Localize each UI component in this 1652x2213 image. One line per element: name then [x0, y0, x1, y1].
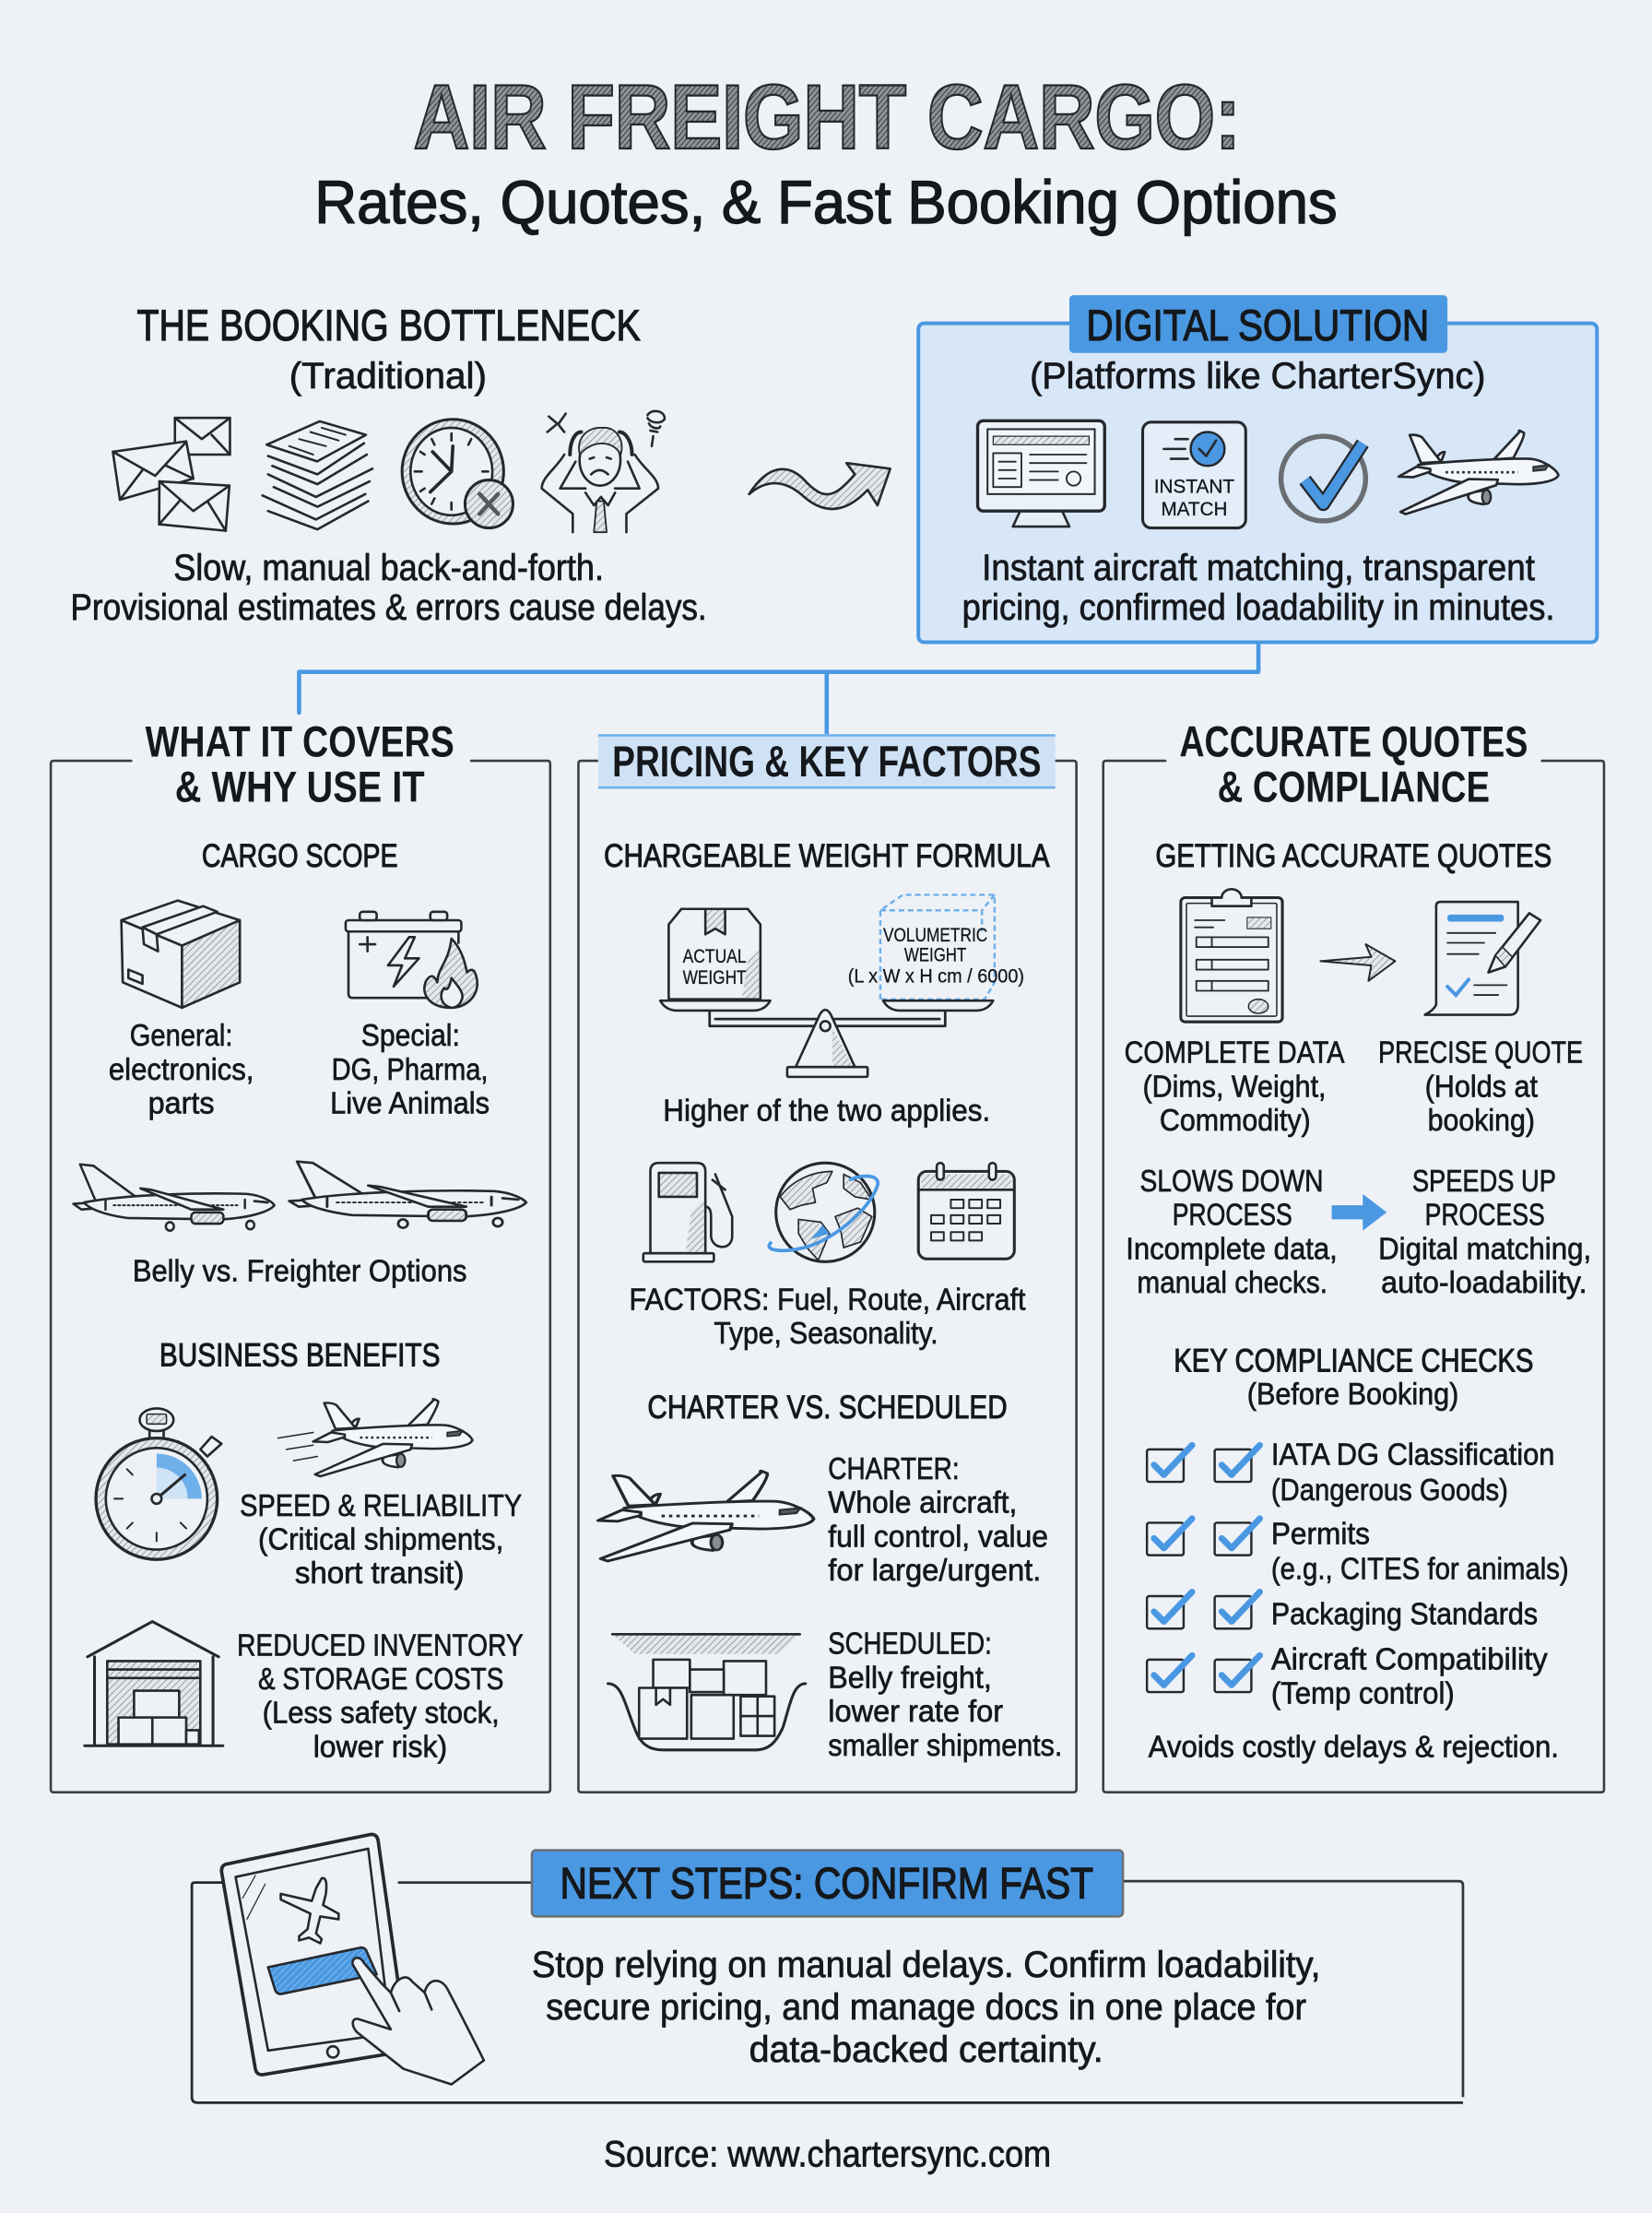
text: next steps body: secure pricing, and manage docs in one place for: [546, 1987, 1306, 2028]
icon: fast airplane: [277, 1399, 472, 1476]
text: speed and reliability: [240, 1489, 522, 1591]
icon: belly aircraft: [74, 1165, 275, 1231]
text: avoids delays: Avoids costly delays & rejection.: [1149, 1730, 1559, 1764]
caption: digital solution: Instant aircraft matching, transparent: [982, 548, 1535, 588]
caption: digital solution: pricing, confirmed loadability in minutes.: [962, 587, 1554, 628]
text: reduced inventory: & STORAGE COSTS: [258, 1663, 503, 1697]
text: special cargo: Special:: [361, 1019, 460, 1053]
heading: what it covers: WHAT IT COVERS: [146, 717, 454, 766]
checklist: compliance items: IATA DG Classification: [1271, 1438, 1554, 1473]
text: slows down process: PROCESS: [1173, 1199, 1292, 1233]
text: speeds up process: Digital matching,: [1378, 1232, 1591, 1266]
text: slows down process: [1126, 1165, 1338, 1300]
checklist: compliance items: Permits: [1271, 1517, 1370, 1551]
subheading: platforms: (Platforms like CharterSync): [1030, 356, 1485, 396]
icon: charter airplane: [598, 1471, 814, 1561]
text: precise quote: [1378, 1036, 1583, 1138]
text: higher of two: Higher of the two applies.: [663, 1094, 990, 1128]
icon: envelopes: [112, 418, 230, 531]
icon: balance scale: WEIGHT: [904, 943, 966, 965]
icon: instant match: MATCH: [1161, 498, 1227, 520]
text: reduced inventory: lower risk): [313, 1730, 447, 1764]
subheading: chargeable weight: CHARGEABLE WEIGHT FORMULA: [604, 838, 1050, 874]
icon: battery and flame: [346, 912, 478, 1008]
arrow: data to quote: [1320, 944, 1395, 981]
caption: traditional booking: Provisional estimates & errors cause delays.: [71, 587, 707, 628]
text: special cargo: Live Animals: [330, 1087, 490, 1121]
label: next steps: NEXT STEPS: CONFIRM FAST: [560, 1860, 1093, 1909]
icon: clock with x badge: [402, 420, 513, 528]
subheading: key compliance checks: (Before Booking): [1247, 1378, 1458, 1412]
text: precise quote: PRECISE QUOTE: [1378, 1036, 1583, 1071]
text: general cargo: [109, 1019, 254, 1121]
connector lines: [299, 643, 1258, 734]
heading: the booking bottleneck: THE BOOKING BOTTLENECK: [136, 302, 641, 350]
text: general cargo: electronics,: [109, 1053, 254, 1087]
text: factors: Type, Seasonality.: [714, 1317, 938, 1351]
subheading: key compliance checks: [1174, 1343, 1533, 1412]
text: scheduled: Belly freight,: [828, 1661, 992, 1695]
text: slows down process: manual checks.: [1137, 1266, 1328, 1300]
panel: next steps: [192, 1834, 1463, 2102]
text: belly vs freighter: Belly vs. Freighter Options: [133, 1255, 467, 1289]
icon: airplane: [1398, 431, 1558, 515]
heading: what it covers: [146, 717, 454, 811]
subheading: charter vs scheduled: CHARTER VS. SCHEDULED: [647, 1390, 1008, 1426]
icon: stopwatch: [96, 1408, 221, 1559]
icon: balance scale: VOLUMETRIC: [883, 924, 987, 946]
icon: cardboard box: [122, 901, 240, 1008]
icon: freighter aircraft: [289, 1162, 526, 1228]
panel: accurate quotes and compliance: [1103, 717, 1604, 1793]
checklist: compliance items: [1147, 1438, 1569, 1710]
heading: accurate quotes: ACCURATE QUOTES: [1179, 717, 1528, 766]
text: special cargo: DG, Pharma,: [332, 1053, 488, 1087]
panel: the booking bottleneck: [71, 302, 707, 628]
icon: quote document and pen: [1425, 902, 1540, 1015]
icon: monitor: [978, 420, 1104, 527]
subheading: key compliance checks: KEY COMPLIANCE CHECKS: [1174, 1343, 1533, 1379]
checklist: compliance items: (e.g., CITES for animals): [1271, 1553, 1569, 1587]
text: general cargo: parts: [148, 1087, 215, 1121]
text: charter: Whole aircraft,: [828, 1486, 1017, 1521]
icon: balance scale: ACTUAL: [683, 945, 747, 967]
heading: accurate quotes: [1179, 717, 1528, 811]
heading: accurate quotes: & COMPLIANCE: [1218, 763, 1490, 811]
text: factors: [630, 1283, 1026, 1351]
icon: tablet with tapping hand: [221, 1834, 484, 2085]
checklist: compliance items: Aircraft Compatibility: [1271, 1643, 1548, 1677]
text: complete data: (Dims, Weight,: [1143, 1070, 1326, 1104]
text: factors: FACTORS: Fuel, Route, Aircraft: [630, 1283, 1026, 1317]
icon: paper stack: [263, 421, 372, 529]
heading: the booking bottleneck: (Traditional): [289, 356, 487, 396]
text: scheduled: SCHEDULED:: [828, 1627, 992, 1662]
checklist: compliance items: Packaging Standards: [1271, 1598, 1538, 1632]
label: next steps: [532, 1850, 1123, 1916]
icon: warehouse: [85, 1622, 223, 1746]
text: next steps body: Stop relying on manual delays. Confirm loadability,: [532, 1945, 1320, 1985]
text: precise quote: booking): [1428, 1104, 1535, 1138]
text: complete data: [1125, 1036, 1345, 1138]
text: reduced inventory: [237, 1628, 524, 1764]
panel: what it covers: [51, 717, 550, 1793]
text: slows down process: SLOWS DOWN: [1139, 1165, 1323, 1199]
text: speed and reliability: short transit): [295, 1556, 464, 1591]
icon: balance scale: [660, 894, 1024, 1077]
text: speeds up process: SPEEDS UP: [1412, 1165, 1556, 1199]
subheading: business benefits: BUSINESS BENEFITS: [159, 1338, 440, 1374]
caption: digital solution: [962, 548, 1554, 628]
caption: traditional booking: [71, 548, 707, 628]
text: reduced inventory: REDUCED INVENTORY: [237, 1628, 524, 1663]
text: next steps body: [532, 1945, 1320, 2070]
text: scheduled: smaller shipments.: [828, 1729, 1062, 1763]
icon: calendar: [918, 1163, 1014, 1259]
icon: balance scale: (L x W x H cm / 6000): [848, 964, 1024, 987]
icon: stressed person: [542, 411, 665, 532]
text: speeds up process: auto-loadability.: [1381, 1266, 1587, 1300]
heading: the booking bottleneck: [136, 302, 641, 396]
label: pricing and key factors: PRICING & KEY FACTORS: [612, 738, 1041, 787]
text: charter: full control, value: [828, 1520, 1048, 1554]
icon: instant match: [1143, 422, 1245, 528]
arrow: blue process arrow: [1332, 1194, 1386, 1231]
arrow: wavy transition: [749, 463, 891, 509]
icon: globe with route: [769, 1163, 878, 1261]
text: special cargo: [330, 1019, 490, 1121]
text: charter: [828, 1452, 1048, 1588]
label: digital solution: DIGITAL SOLUTION: [1086, 302, 1429, 350]
text: precise quote: (Holds at: [1425, 1070, 1539, 1104]
text: speed and reliability: SPEED & RELIABILITY: [240, 1489, 522, 1523]
text: speeds up process: PROCESS: [1425, 1199, 1545, 1233]
subtitle: Rates, Quotes, & Fast Booking Options: [314, 168, 1338, 236]
source line: Source: www.chartersync.com: [604, 2134, 1051, 2174]
text: scheduled: lower rate for: [828, 1695, 1003, 1729]
text: reduced inventory: (Less safety stock,: [263, 1697, 500, 1731]
text: next steps body: data-backed certainty.: [749, 2030, 1103, 2070]
text: charter: for large/urgent.: [828, 1554, 1041, 1588]
text: charter: CHARTER:: [828, 1452, 960, 1486]
title: AIR FREIGHT CARGO:: [413, 65, 1241, 168]
icon: balance scale: WEIGHT: [683, 966, 747, 988]
icon: clipboard: [1181, 889, 1282, 1022]
text: scheduled: [828, 1627, 1062, 1763]
caption: traditional booking: Slow, manual back-and-forth.: [173, 548, 604, 588]
subheading: cargo scope: CARGO SCOPE: [202, 838, 398, 874]
icon: cargo hold: [608, 1634, 806, 1750]
text: general cargo: General:: [130, 1019, 233, 1053]
checklist: compliance items: (Dangerous Goods): [1271, 1473, 1508, 1508]
text: complete data: Commodity): [1160, 1104, 1311, 1138]
checklist: compliance items: (Temp control): [1271, 1676, 1455, 1710]
text: speeds up process: [1378, 1165, 1591, 1300]
panel: pricing and key factors: [578, 734, 1077, 1793]
text: complete data: COMPLETE DATA: [1125, 1036, 1345, 1071]
icon: fuel pump: [643, 1163, 732, 1261]
text: slows down process: Incomplete data,: [1126, 1232, 1338, 1266]
text: speed and reliability: (Critical shipments,: [258, 1523, 503, 1557]
panel: digital solution: [918, 295, 1597, 643]
icon: instant match: INSTANT: [1154, 475, 1234, 497]
icon: check circle: [1281, 436, 1365, 521]
subheading: getting accurate quotes: GETTING ACCURATE QUOTES: [1155, 838, 1552, 874]
heading: what it covers: & WHY USE IT: [175, 763, 425, 811]
